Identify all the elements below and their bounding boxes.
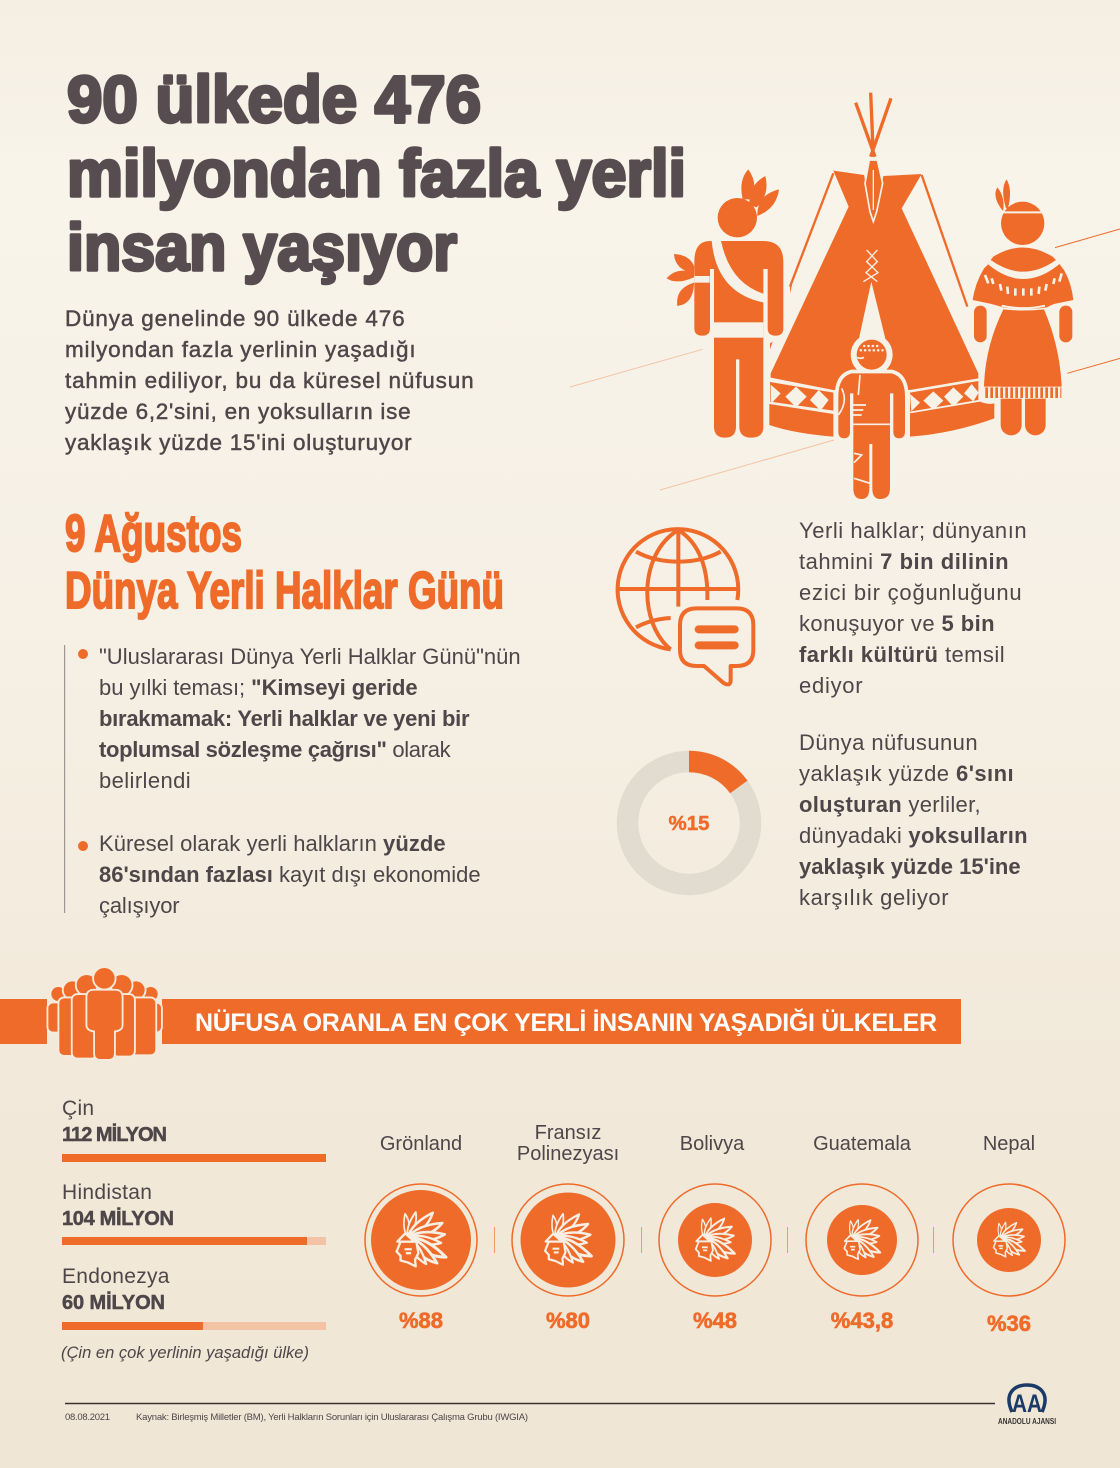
country: Nepal: %36 [987,1311,1031,1336]
source and date: 08.08.2021 [65,1412,110,1423]
donut chart: %15 [628,762,750,884]
country: Grönland: Grönland [380,1133,462,1155]
language text: konuşuyor ve 5 bin [799,611,995,636]
tipi [769,93,994,437]
donut chart: %15: %15 [668,812,710,835]
list: most populous: 104 MİLYON [62,1207,174,1230]
logo: Anadolu Ajansı: ANADOLU AJANSI [998,1416,1056,1426]
child figure [838,334,905,499]
population text: oluşturan yerliler, [799,792,981,817]
population text: dünyadaki yoksulların [799,823,1028,848]
list: most populous: (Çin en çok yerlinin yaşadığı ülke) [61,1344,309,1362]
bullet: theme: bırakmamak: Yerli halklar ve yeni bir [99,706,470,731]
title: milyondan fazla yerli [67,136,686,210]
population text: yaklaşık yüzde 15'ine [799,854,1021,879]
country: Fransız Polinezyası [512,1122,624,1333]
accent lines [570,229,1120,490]
list: most populous [61,1097,326,1362]
country: Fransız Polinezyası: Polinezyası [517,1143,619,1165]
title: insan yaşıyor [67,210,457,284]
population text: karşılık geliyor [799,885,949,910]
country: Guatemala [806,1133,918,1333]
logo: Anadolu Ajansı: AA [1012,1390,1042,1418]
intro paragraph: yaklaşık yüzde 15'ini oluşturuyor [65,430,412,455]
bullet: theme [78,644,521,793]
bullet: theme: bu yılki teması; "Kimseyi geride [99,675,418,700]
bullet: informal economy [78,831,481,918]
bullet: informal economy: çalışıyor [99,893,180,918]
country: Grönland [365,1133,477,1333]
section heading: 9 Ağustos: Dünya Yerli Halklar Günü [65,562,504,620]
icon: crowd of people [48,968,161,1059]
intro paragraph: tahmin ediliyor, bu da küresel nüfusun [65,368,474,393]
language text [799,518,1027,698]
illustration: tipi and indigenous family [570,93,1120,499]
language text: farklı kültürü temsil [799,642,1005,667]
country: Fransız Polinezyası: %80 [546,1308,590,1333]
country: Nepal [953,1133,1065,1336]
country: Bolivya [659,1133,771,1333]
country: Guatemala: Guatemala [813,1133,912,1155]
icon: globe with speech bubble [618,529,753,684]
intro paragraph: Dünya genelinde 90 ülkede 476 [65,306,405,331]
list: most populous: Endonezya [62,1265,170,1288]
country: Grönland: %88 [399,1308,443,1333]
country: Fransız Polinezyası: Fransız [535,1122,601,1144]
section heading: 9 Ağustos: 9 Ağustos [65,505,242,563]
logo: Anadolu Ajansı [998,1385,1056,1426]
population text [799,730,1028,910]
title [67,62,686,284]
list: most populous: Hindistan [62,1181,152,1204]
list: most populous: 60 MİLYON [62,1291,165,1314]
population text: Dünya nüfusunun [799,730,978,755]
country: Bolivya: Bolivya [680,1133,745,1155]
country: Nepal: Nepal [983,1133,1035,1155]
list: most populous: Çin [62,1097,94,1120]
title: 90 ülkede 476 [67,62,481,136]
banner: NÜFUSA ORANLA EN ÇOK YERLİ İNSANIN YAŞADIĞI ÜLKELER [195,1008,937,1037]
country: Bolivya: %48 [693,1308,737,1333]
language text: Yerli halklar; dünyanın [799,518,1027,543]
list: most populous: 112 MİLYON [62,1123,167,1146]
language text: ediyor [799,673,863,698]
woman figure [973,179,1073,435]
bullet: informal economy: Küresel olarak yerli halkların yüzde [99,831,446,856]
bullet: theme: toplumsal sözleşme çağrısı" olarak [99,737,452,762]
banner [0,999,961,1044]
source and date: Kaynak: Birleşmiş Milletler (BM), Yerli Halkların Sorunları için Uluslararası Çalışma Grubu (IWGIA) [136,1412,528,1423]
bullet: informal economy: 86'sından fazlası kayıt dışı ekonomide [99,862,481,887]
bullet: theme: belirlendi [99,768,191,793]
section heading: 9 Ağustos [65,505,504,620]
bullet: theme: "Uluslararası Dünya Yerli Halklar Günü"nün [99,644,521,669]
language text: tahmini 7 bin dilinin [799,549,1009,574]
intro paragraph: yüzde 6,2'sini, en yoksulların ise [65,399,411,424]
man figure [667,169,783,438]
language text: ezici bir çoğunluğunu [799,580,1022,605]
intro paragraph: milyondan fazla yerlinin yaşadığı [65,337,416,362]
population text: yaklaşık yüzde 6'sını [799,761,1014,786]
country: Guatemala: %43,8 [831,1308,893,1333]
intro paragraph [65,306,474,455]
